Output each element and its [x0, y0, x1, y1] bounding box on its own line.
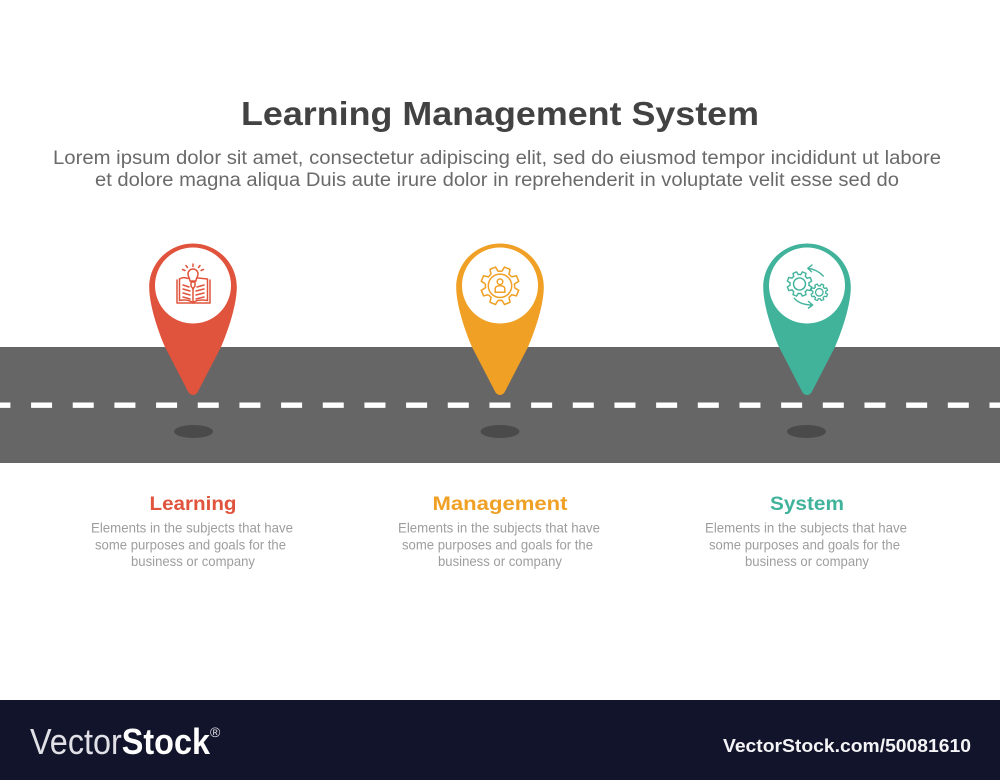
subtitle text: Lorem ipsum dolor sit amet, consectetur adipiscing elit, sed do eiusmod tempor incididunt ut labore	[53, 148, 941, 169]
pin: system	[763, 244, 851, 395]
small gear	[808, 281, 830, 303]
footer url: VectorStock.com/50081610	[723, 736, 971, 756]
column: learning	[91, 494, 293, 569]
pin shadows	[174, 425, 826, 438]
description: management: some purposes and goals for the	[402, 536, 593, 552]
icon: gear with person	[475, 261, 525, 311]
icon: book with light bulb	[177, 264, 210, 303]
title: Learning Management System	[241, 95, 759, 132]
column: system	[705, 494, 907, 569]
description: system: some purposes and goals for the	[709, 536, 900, 552]
description: learning	[91, 520, 293, 569]
column: management	[398, 494, 600, 569]
description: learning: business or company	[131, 553, 255, 569]
description: management	[398, 520, 600, 569]
heading: learning: Learning	[150, 494, 236, 515]
subtitle text	[53, 148, 941, 191]
rotation arrows	[808, 265, 823, 276]
footer logo: VectorStock	[30, 721, 211, 762]
large gear	[783, 268, 816, 300]
subtitle text: et dolore magna aliqua Duis aute irure dolor in reprehenderit in voluptate velit esse sed do	[95, 170, 899, 191]
description: management: Elements in the subjects that have	[398, 520, 600, 536]
road	[0, 347, 1000, 463]
heading: management: Management	[432, 494, 568, 515]
description: learning: some purposes and goals for the	[95, 536, 286, 552]
description: management: business or company	[438, 553, 562, 569]
description: system: business or company	[745, 553, 869, 569]
heading: system: System	[770, 494, 844, 515]
description: system	[705, 520, 907, 569]
description: system: Elements in the subjects that have	[705, 520, 907, 536]
icon: rotating gears	[783, 265, 830, 308]
pin: learning	[149, 244, 237, 395]
pin: management	[456, 244, 544, 395]
footer bar	[0, 700, 1000, 780]
description: learning: Elements in the subjects that have	[91, 520, 293, 536]
road centre dashed line	[0, 403, 1000, 408]
registered mark: ®	[210, 724, 221, 740]
